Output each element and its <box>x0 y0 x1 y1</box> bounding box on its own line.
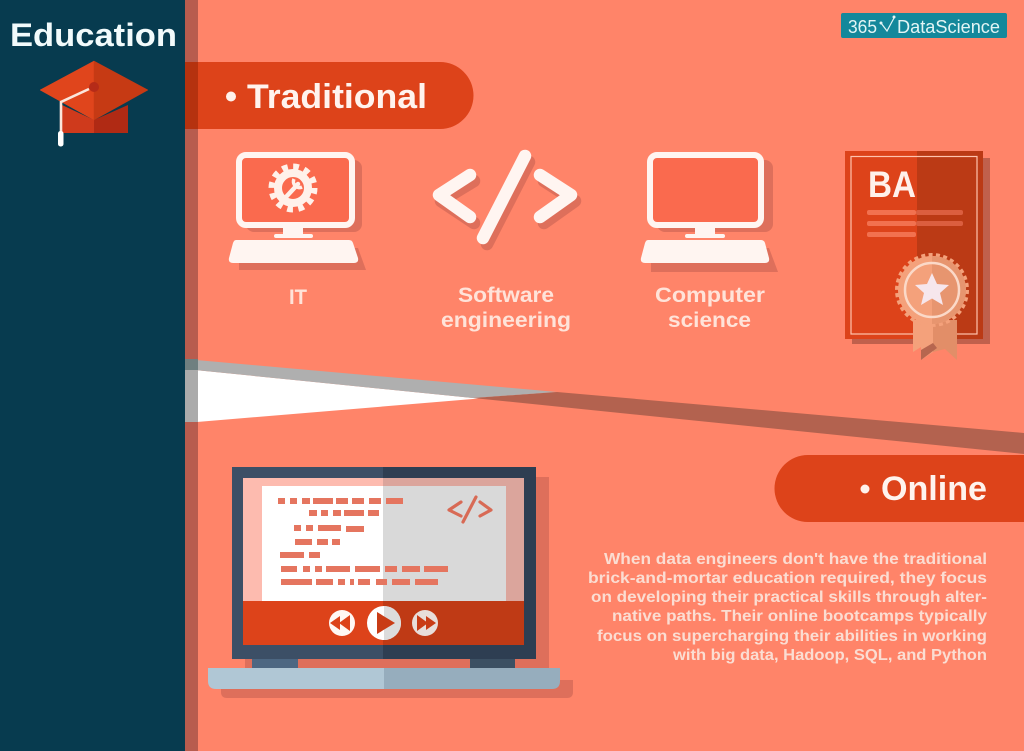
icon: ribbon <box>913 320 957 360</box>
laptop shadow <box>221 477 573 698</box>
icon: laptop with code video <box>208 467 573 698</box>
icon: code brackets <box>439 156 575 244</box>
text block: online education description <box>588 551 987 664</box>
logo: 365 DataScience: 365 <box>848 17 877 37</box>
icon: BA diploma <box>845 151 990 360</box>
laptop frame <box>232 467 536 659</box>
label: Software engineering: engineering <box>441 309 571 332</box>
logo: 365 DataScience: DataScience <box>897 17 1000 37</box>
heading pill: Online: Online <box>881 470 987 508</box>
label: Computer science <box>655 284 765 332</box>
label: Computer science: Computer <box>655 284 765 307</box>
heading pill: Traditional: Traditional <box>247 78 427 116</box>
heading pill: Online <box>774 455 1024 522</box>
laptop feet <box>252 659 515 668</box>
text block: online education description: focus on supercharging their abilities in working <box>597 628 987 645</box>
text block: online education description: native paths. Their online bootcamps typically <box>612 608 987 625</box>
code lines <box>278 498 448 585</box>
icon: award seal <box>897 255 967 325</box>
text block: online education description: brick-and-mortar education required, they focus <box>588 570 987 587</box>
diploma title: BA <box>868 164 916 205</box>
icon: computer science monitor <box>641 155 778 272</box>
text block: online education description: with big data, Hadoop, SQL, and Python <box>672 647 987 664</box>
label: IT: IT <box>289 286 307 309</box>
icon: small code brackets <box>449 497 491 522</box>
label: Computer science: science <box>668 309 751 332</box>
icon: gear and wrench <box>272 166 314 210</box>
title: Education: Education <box>10 17 177 53</box>
heading pill: Traditional <box>185 62 473 129</box>
icon: graduation cap <box>40 61 148 146</box>
icon: IT computer with gear <box>229 155 366 270</box>
icon: play button <box>367 606 401 640</box>
video control bar <box>243 601 524 645</box>
label: Software engineering <box>441 284 571 332</box>
laptop base <box>208 668 560 689</box>
icon: rewind button <box>329 610 355 636</box>
text block: online education description: When data engineers don't have the traditional <box>604 551 987 568</box>
light wedge and shadow band <box>185 359 1024 454</box>
text block: online education description: on developing their practical skills through alter- <box>591 589 987 606</box>
label: Software engineering: Software <box>458 284 554 307</box>
logo: 365 DataScience <box>841 13 1007 38</box>
sidebar panel <box>0 0 198 751</box>
icon: fast-forward button <box>412 610 438 636</box>
